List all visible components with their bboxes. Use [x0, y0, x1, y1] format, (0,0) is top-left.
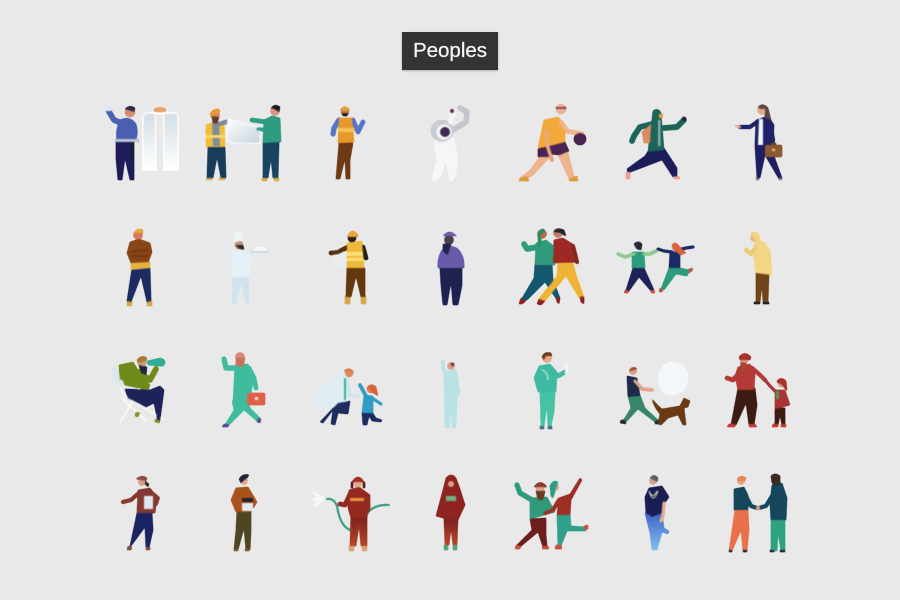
chef hat [233, 232, 242, 242]
figure: director in chair with megaphone [110, 356, 165, 423]
figure: nurse in pale teal [443, 361, 466, 428]
figure: person in yellow coat [746, 232, 772, 304]
figure: man walking dog past a white cloud [620, 362, 690, 425]
figure: adult holding child's hand [727, 354, 790, 427]
folding chair [112, 369, 164, 423]
dog [652, 398, 690, 425]
figure: woman with clipboard [123, 476, 158, 550]
red medical case [247, 393, 265, 405]
figure: firefighter with hose [311, 477, 389, 551]
figure: two workers carrying a glass panel [206, 105, 281, 181]
title: Peoples [413, 39, 487, 62]
serving tray [251, 247, 269, 252]
walk-through metal detector [143, 108, 178, 170]
figure: man with gold necklaces [645, 476, 669, 550]
child [765, 378, 790, 427]
figure: construction worker in orange vest [333, 106, 363, 179]
basketball [574, 133, 586, 145]
figure: construction worker from behind [331, 231, 366, 304]
figure: hooded figure running with backpack [626, 109, 686, 179]
figure: astronaut [431, 108, 467, 182]
figure: man in purple jacket [438, 232, 464, 305]
water spray [311, 491, 325, 508]
figure: couple walking [519, 228, 584, 305]
figure: basketball player [519, 104, 586, 181]
briefcase [765, 143, 782, 157]
figure: businesswoman with briefcase [736, 105, 782, 180]
glass panel [226, 119, 260, 143]
figure: two men shaking hands [729, 474, 787, 552]
figure: paramedic with red case [222, 352, 265, 427]
clapperboard [242, 498, 253, 511]
megaphone [147, 358, 165, 366]
figure: two people dancing [618, 242, 693, 293]
figure: person in red hooded coat [436, 475, 465, 550]
figure: doctor with child [314, 369, 382, 425]
title [402, 32, 498, 70]
white cloud [658, 362, 688, 395]
figure: pair dancing together [515, 478, 588, 549]
figure: man with clapperboard [231, 474, 257, 551]
figure: security guard with metal detector [105, 105, 178, 180]
figure: doctor in teal scrubs [534, 352, 568, 429]
figure: chef with tray [219, 232, 269, 304]
child [360, 385, 382, 425]
figure: construction worker with crossed arms [127, 229, 152, 306]
